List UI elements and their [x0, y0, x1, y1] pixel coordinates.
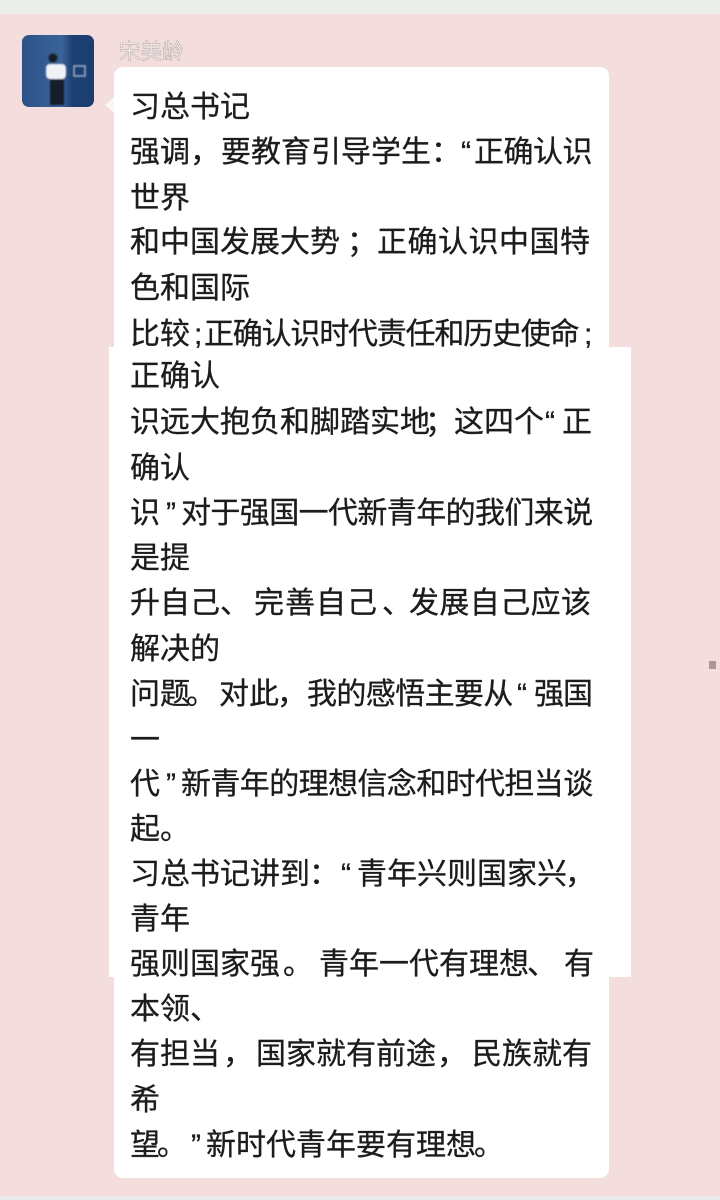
message text: 希	[130, 1075, 160, 1119]
message text: 这四个	[454, 397, 544, 441]
bottom strip	[0, 1196, 720, 1200]
message text: 确认	[130, 443, 190, 487]
message text: 正确认识时代责任和历史使命	[204, 309, 579, 353]
message text: 青年	[130, 894, 190, 938]
message text: 代	[130, 759, 160, 803]
message text: “	[341, 858, 351, 891]
message text: ，	[190, 127, 220, 171]
message text: 和中国发展大势	[130, 217, 340, 261]
message text: ;	[194, 318, 202, 351]
message text: 世界	[130, 173, 190, 217]
message text: 新青年的理想信念和时代担当谈	[181, 759, 593, 803]
message text: ；	[347, 217, 377, 261]
message text: 正确认	[130, 351, 220, 395]
message text: ，	[277, 669, 307, 713]
message text: 新时代青年要有理想	[206, 1120, 476, 1164]
message text: 解决的	[130, 624, 220, 668]
message text: 是提	[130, 533, 190, 577]
message text: 识	[130, 488, 160, 532]
message text: 我的感悟主要从	[307, 669, 513, 713]
message text: 一	[130, 715, 160, 759]
message text: ”	[191, 1129, 201, 1162]
message text: 完善自己	[254, 578, 378, 622]
message text: “	[517, 678, 527, 711]
message text: 。	[186, 669, 216, 713]
message text: “	[545, 406, 555, 439]
message text: 对此	[219, 669, 279, 713]
message text	[130, 82, 595, 1164]
message text: 习总书记	[130, 82, 250, 126]
message text: ;	[584, 318, 592, 351]
message text: 要教育引导学生	[221, 127, 431, 171]
message text: 强则国家强	[130, 939, 280, 983]
message text: 升自己	[130, 578, 220, 622]
scroll indicator dot	[709, 661, 716, 669]
message text: 。	[283, 939, 313, 983]
message text: ：	[431, 127, 461, 171]
bubble body	[114, 67, 609, 1178]
message text: 民族就有	[472, 1029, 592, 1073]
message text: 青年一代有理想	[319, 939, 529, 983]
message text: 国家就有前途	[256, 1029, 436, 1073]
message text: 比较	[130, 309, 190, 353]
message text: ”	[166, 768, 176, 801]
message text: 正	[562, 397, 592, 441]
message text: 问题	[130, 669, 190, 713]
message text: 、	[220, 578, 250, 622]
message text: ，	[437, 1029, 467, 1073]
message text: 强调	[130, 127, 190, 171]
message text: 有担当	[130, 1029, 220, 1073]
message text: 对于强国一代新青年的我们来说	[181, 488, 593, 532]
message text: 。	[474, 1120, 504, 1164]
message bubble	[105, 67, 631, 1178]
message text: 识远大抱负和脚踏实地	[130, 397, 430, 441]
message text: ，	[565, 849, 595, 893]
message text: ”	[166, 497, 176, 530]
wider pasted white patch	[109, 347, 631, 977]
message text: 起。	[130, 804, 190, 848]
message text: 青年兴则国家兴	[357, 849, 567, 893]
message text: 正确认识中国特	[377, 217, 590, 261]
message text: ：	[309, 849, 339, 893]
message text: “	[461, 136, 471, 169]
message text: 有	[564, 939, 594, 983]
message text: ，	[223, 1029, 253, 1073]
message text: 发展自己应该	[409, 578, 591, 622]
sender name: 宋美龄	[119, 35, 184, 66]
message text: 本领、	[130, 984, 220, 1028]
message text: ；	[425, 397, 455, 441]
message text: 望	[130, 1120, 160, 1164]
message text: 色和国际	[130, 263, 250, 307]
message text: 习总书记讲到	[130, 849, 310, 893]
bubble tail	[105, 97, 114, 113]
message text: 正确认识	[474, 127, 592, 171]
message text: 。	[157, 1120, 187, 1164]
message text: 、	[527, 939, 557, 983]
top status strip	[0, 0, 720, 14]
icon: avatar	[22, 35, 94, 107]
message text: 强国	[534, 669, 592, 713]
message text: 、	[382, 578, 412, 622]
